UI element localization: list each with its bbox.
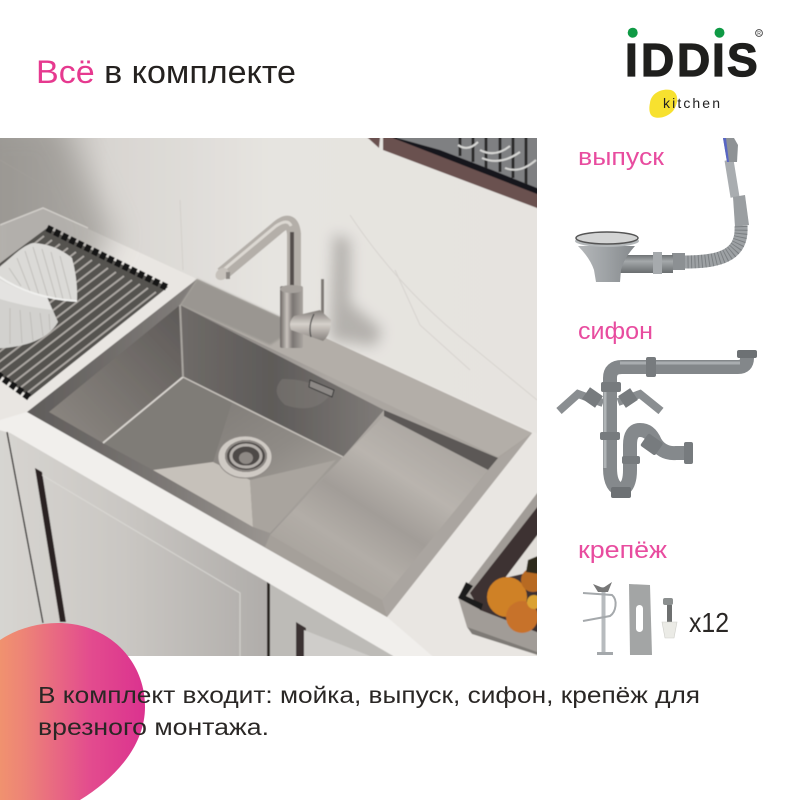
window shelf with glassware <box>367 138 537 209</box>
overflow slot <box>309 380 334 397</box>
marble wall <box>0 138 537 434</box>
basin walls and floor <box>49 305 384 533</box>
tray with fruit <box>458 492 537 656</box>
cabinet doors <box>0 430 393 656</box>
faucet <box>213 222 331 348</box>
description text: врезного монтажа. <box>38 714 269 740</box>
drainboard <box>265 410 498 617</box>
wall shadow of faucet <box>330 234 382 346</box>
icon: mounting hardware <box>583 582 677 655</box>
icon: drain outlet <box>575 138 749 282</box>
left-side shade <box>0 138 122 264</box>
label: сифон: сифон <box>578 318 653 345</box>
drain strainer <box>218 436 272 478</box>
logo: IDDIS kitchen: IDDIS <box>625 34 758 86</box>
label: выпуск: выпуск <box>578 144 665 171</box>
white ribbed bowls <box>0 243 77 349</box>
logo: IDDIS kitchen: kitchen <box>663 95 720 111</box>
label: крепёж: крепёж <box>578 537 667 564</box>
icon: siphon <box>559 350 757 498</box>
description text: В комплект входит: мойка, выпуск, сифон, крепёж для <box>38 682 700 708</box>
title: Всё в комплекте <box>36 54 296 90</box>
sink rim <box>27 279 532 617</box>
logo: IDDIS kitchen <box>625 28 762 118</box>
description text <box>38 682 700 740</box>
label: x12: x12 <box>689 607 729 638</box>
gradient blob <box>0 623 145 800</box>
drying mat <box>0 228 168 398</box>
logo: IDDIS kitchen: R <box>757 31 761 37</box>
counter front edge <box>0 412 431 656</box>
counter top <box>0 209 195 420</box>
photo: stainless kitchen sink <box>0 138 537 656</box>
